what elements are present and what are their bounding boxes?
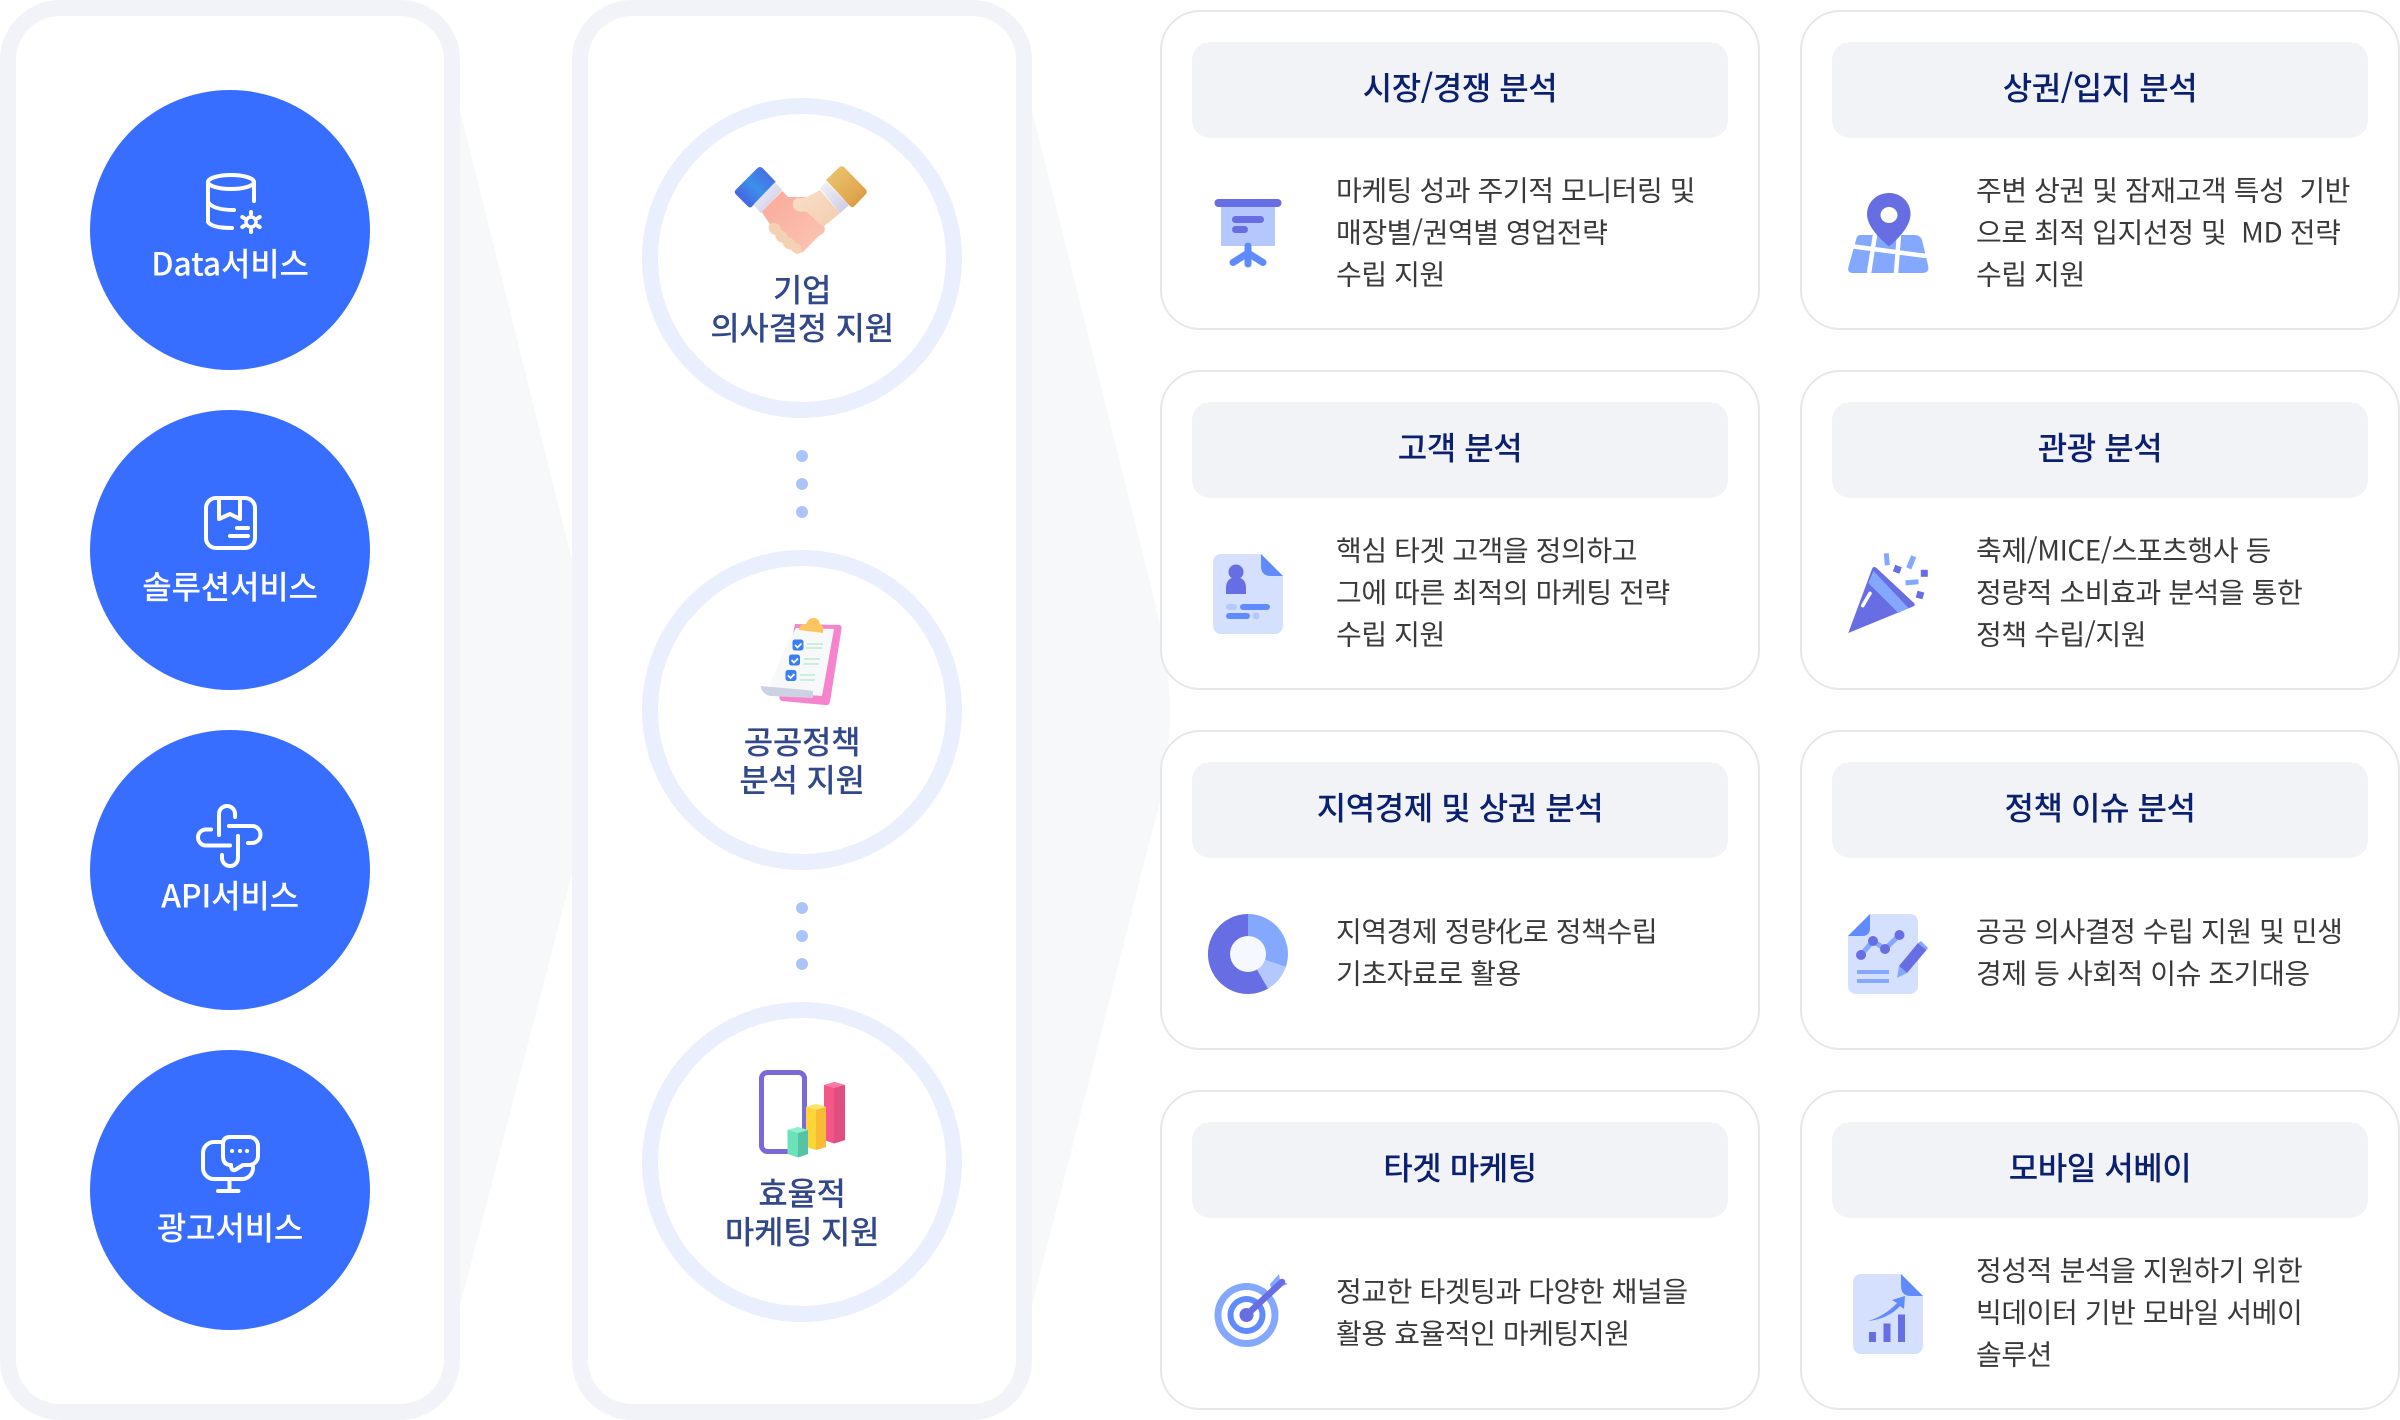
header bar [1832, 1122, 2368, 1218]
title: 시장/경쟁 분석 [1363, 64, 1557, 110]
description: 핵심 타겟 고객을 정의하고 [1336, 530, 1637, 570]
description: 주변 상권 및 잠재고객 특성 기반 [1976, 170, 2350, 210]
ring [650, 558, 954, 862]
support: efficient marketing [650, 1010, 954, 1314]
panel frame [8, 8, 452, 1412]
card frame [1161, 1091, 1759, 1409]
ring [650, 106, 954, 410]
label: 공공정책 [744, 718, 860, 764]
description: 수립 지원 [1336, 614, 1445, 654]
description: 매장별/권역별 영업전략 [1336, 212, 1607, 252]
description: 지역경제 정량化로 정책수립 [1336, 911, 1657, 951]
description: 정성적 분석을 지원하기 위한 [1976, 1250, 2302, 1290]
header bar [1832, 402, 2368, 498]
support: corporate decision [650, 106, 954, 410]
circle [90, 730, 370, 1010]
icon: handshake [735, 166, 867, 256]
icon: clipboard [760, 618, 842, 705]
card frame [1801, 731, 2399, 1049]
funnel: support to analysis [1032, 110, 1170, 1306]
card: 시장/경쟁 분석 [1161, 11, 1759, 329]
label line 2: 분석 지원 [739, 756, 865, 802]
icon: donut chart [1208, 914, 1288, 994]
title: 정책 이슈 분석 [2005, 784, 2195, 830]
icon: presentation board [1214, 199, 1282, 264]
card: 정책 이슈 분석 [1801, 731, 2399, 1049]
description: 마케팅 성과 주기적 모니터링 및 [1336, 170, 1695, 210]
icon: phone and bars [762, 1072, 845, 1158]
card: 관광 분석 [1801, 371, 2399, 689]
header bar [1192, 42, 1728, 138]
description: 축제/MICE/스포츠행사 등 [1976, 530, 2271, 570]
title: 타겟 마케팅 [1383, 1144, 1537, 1190]
connector dots [796, 902, 808, 970]
icon: API cross [198, 806, 260, 866]
icon: chart document with pencil [1848, 914, 1928, 994]
description: 공공 의사결정 수립 지원 및 민생 [1976, 911, 2343, 951]
label: API서비스 [161, 872, 299, 918]
circle [90, 410, 370, 690]
panel: support areas [580, 8, 1024, 1412]
icon: map pin [1848, 193, 1928, 273]
card frame [1161, 731, 1759, 1049]
service: Solution [90, 410, 370, 690]
title: 고객 분석 [1398, 424, 1522, 470]
header bar [1192, 1122, 1728, 1218]
title: 상권/입지 분석 [2003, 64, 2197, 110]
header bar [1192, 762, 1728, 858]
description: 으로 최적 입지선정 및 MD 전략 [1976, 212, 2340, 252]
card frame [1801, 11, 2399, 329]
icon: monitor chat [203, 1137, 258, 1191]
title: 모바일 서베이 [2009, 1144, 2191, 1190]
panel frame [580, 8, 1024, 1412]
card: 지역경제 및 상권 분석 [1161, 731, 1759, 1049]
circle [90, 90, 370, 370]
header bar [1832, 762, 2368, 858]
card: 고객 분석 [1161, 371, 1759, 689]
title: 지역경제 및 상권 분석 [1317, 784, 1603, 830]
ring [650, 1010, 954, 1314]
description: 수립 지원 [1336, 254, 1445, 294]
icon: database gear [208, 175, 260, 232]
card: 모바일 서베이 [1801, 1091, 2399, 1409]
icon: customer document [1213, 554, 1283, 634]
card frame [1801, 371, 2399, 689]
label: Data서비스 [151, 240, 309, 286]
label line 2: 의사결정 지원 [710, 304, 894, 350]
card frame [1161, 371, 1759, 689]
support: public policy [650, 558, 954, 862]
header bar [1192, 402, 1728, 498]
panel: services [8, 8, 452, 1412]
card: 상권/입지 분석 [1801, 11, 2399, 329]
card frame [1801, 1091, 2399, 1409]
connector dots [796, 450, 808, 518]
description: 정교한 타겟팅과 다양한 채널을 [1336, 1271, 1688, 1311]
circle [90, 1050, 370, 1330]
service: API [90, 730, 370, 1010]
description: 솔루션 [1976, 1334, 2052, 1374]
card: 타겟 마케팅 [1161, 1091, 1759, 1409]
card frame [1161, 11, 1759, 329]
service: Data [90, 90, 370, 370]
description: 활용 효율적인 마케팅지원 [1336, 1313, 1630, 1353]
header bar [1832, 42, 2368, 138]
funnel: services to support [460, 110, 572, 1306]
icon: party popper [1848, 553, 1928, 633]
description: 경제 등 사회적 이슈 조기대응 [1976, 953, 2310, 993]
description: 정량적 소비효과 분석을 통한 [1976, 572, 2302, 612]
description: 정책 수립/지원 [1976, 614, 2146, 654]
description: 빅데이터 기반 모바일 서베이 [1976, 1292, 2302, 1332]
icon: target [1214, 1274, 1288, 1347]
label: 솔루션서비스 [142, 562, 318, 608]
label: 기업 [773, 266, 831, 312]
label line 2: 마케팅 지원 [725, 1208, 879, 1254]
description: 수립 지원 [1976, 254, 2085, 294]
description: 기초자료로 활용 [1336, 953, 1521, 993]
label: 효율적 [758, 1169, 846, 1215]
description: 그에 따른 최적의 마케팅 전략 [1336, 572, 1670, 612]
icon: growth document [1853, 1274, 1923, 1354]
service: Advertising [90, 1050, 370, 1330]
icon: box [206, 498, 255, 548]
label: 광고서비스 [157, 1204, 303, 1250]
title: 관광 분석 [2038, 424, 2162, 470]
